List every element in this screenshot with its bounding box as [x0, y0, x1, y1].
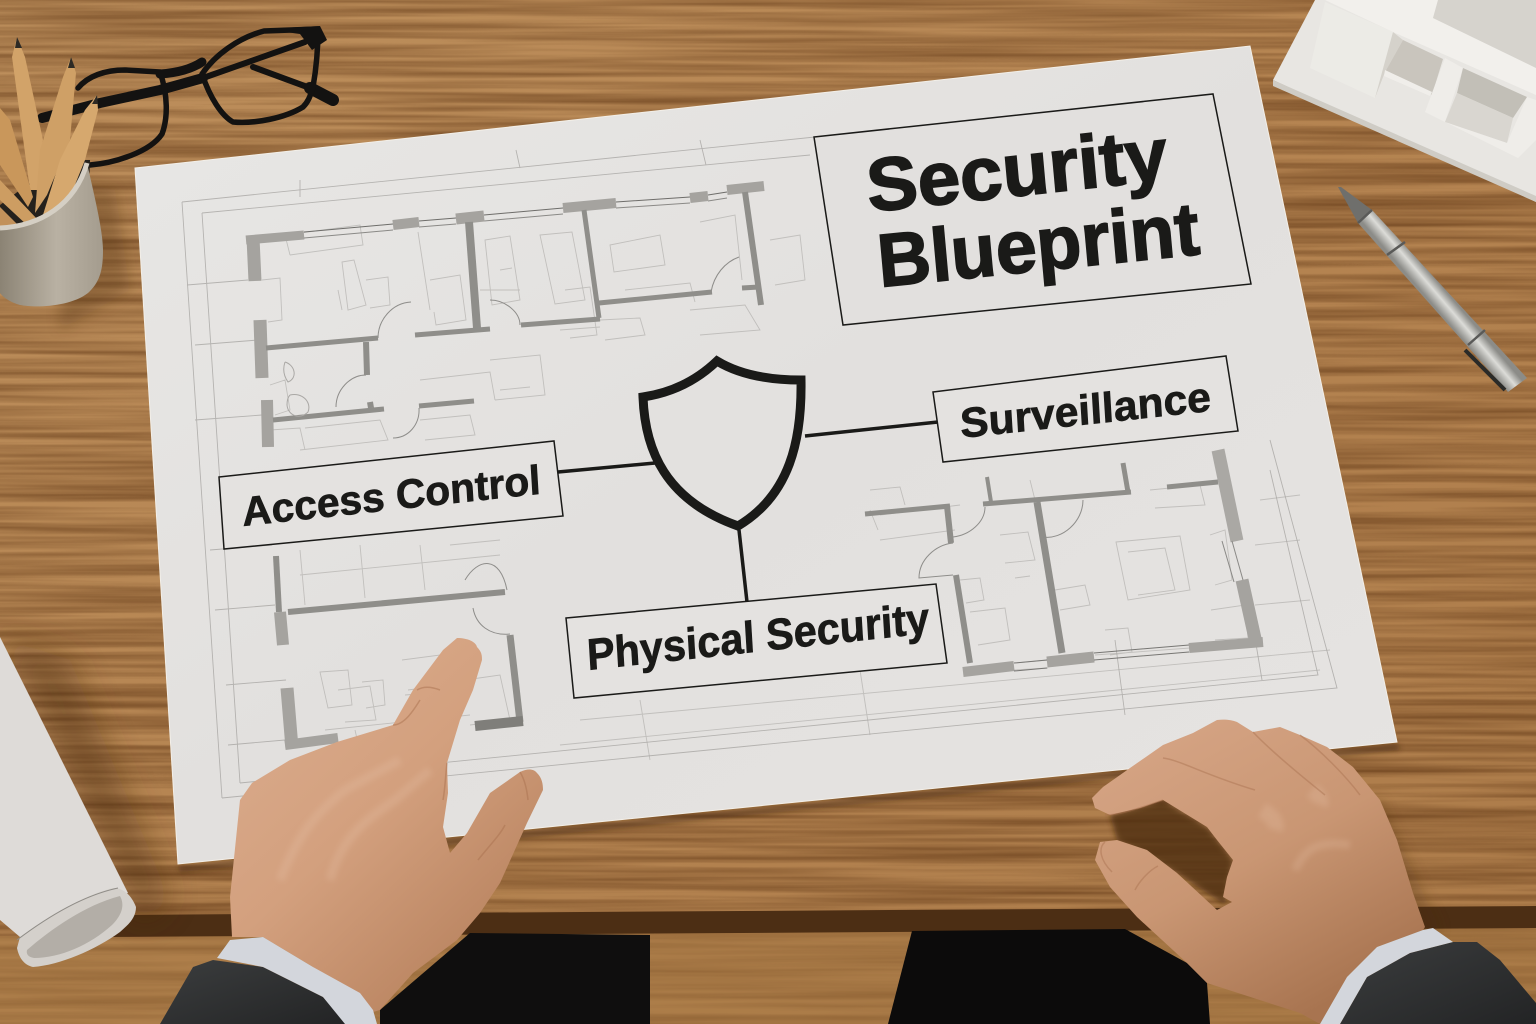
object shadows on the desk: [0, 180, 1440, 950]
icon: shield: [643, 361, 801, 526]
label: Physical Security: Physical Security: [586, 594, 931, 680]
connector lines from shield to labels: [558, 422, 938, 602]
person: suit: [160, 929, 1536, 1024]
icon: paper roll: [0, 637, 136, 967]
label: Surveillance: [933, 356, 1238, 462]
left shirt cuff: [217, 937, 377, 1024]
blueprint paper sheet: [135, 46, 1397, 864]
icon: architectural model: [1273, 0, 1536, 202]
right hand: [1092, 720, 1453, 1024]
floor plan: bottom left: [276, 556, 523, 748]
title block: [814, 94, 1251, 325]
paper shadow: [178, 744, 1400, 872]
right shirt cuff: [1320, 928, 1453, 1024]
floor plan: bottom right: [865, 450, 1263, 672]
faint drafting grid and furniture lines: [182, 137, 1337, 798]
label: Access Control: [219, 441, 563, 549]
label: Access Control: Access Control: [241, 457, 542, 535]
desk front edge and floor: [0, 906, 1536, 1024]
title: Blueprint: Blueprint: [874, 186, 1203, 303]
icon: pen: [1338, 187, 1527, 392]
floor plan: top left: [246, 186, 764, 447]
label: Surveillance: Surveillance: [959, 373, 1212, 447]
left hand pointing: [217, 638, 543, 1024]
icon: pencil cup: [0, 37, 103, 306]
icon: glasses: [42, 26, 333, 165]
title: Security: Security: [863, 112, 1171, 228]
